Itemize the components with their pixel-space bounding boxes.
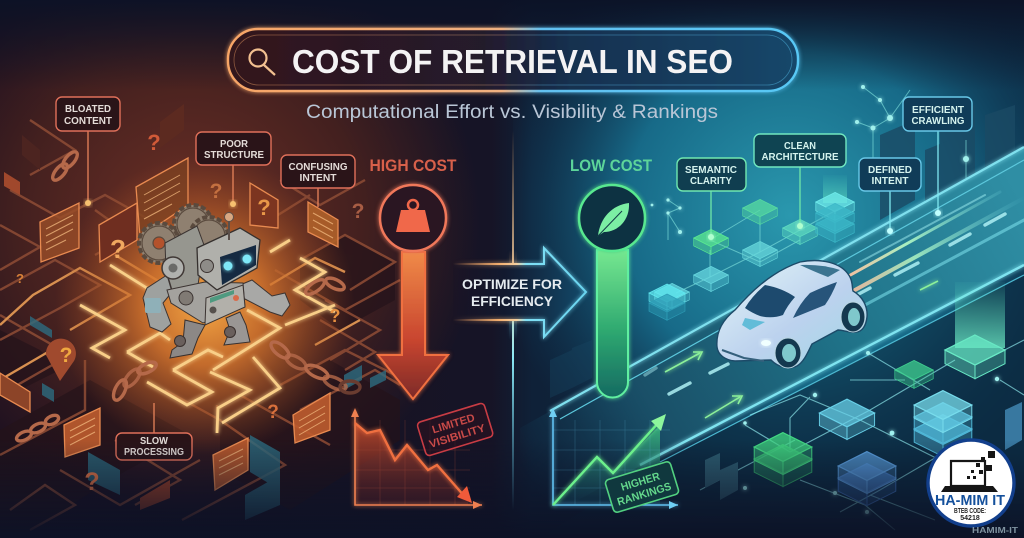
clean architecture label: CLEAN: [784, 141, 816, 152]
robot: [139, 205, 290, 358]
question marks: ?: [147, 130, 161, 155]
area below road: [540, 275, 1024, 538]
panel: lower right network: [700, 282, 1024, 530]
maze walls bright: [0, 255, 360, 380]
efficient crawling label: EFFICIENT: [912, 105, 964, 116]
question marks: ?: [210, 180, 222, 203]
confusing intent label: [281, 155, 355, 207]
road dashes: [611, 214, 1005, 396]
semantic clarity label: CLARITY: [690, 176, 732, 187]
poor structure label: STRUCTURE: [204, 150, 264, 161]
efficient crawling label: [903, 97, 972, 216]
limited visibility stamp: [417, 403, 494, 456]
dark wall blocks: [0, 235, 400, 538]
icon: feather: [597, 203, 629, 237]
title search bar: [228, 29, 798, 91]
map pin with question mark: [46, 339, 76, 381]
clean architecture label: [754, 134, 846, 229]
document panels: [0, 104, 338, 510]
higher rankings stamp: [605, 461, 679, 513]
divider: [509, 130, 517, 510]
network nodes top: [651, 85, 969, 234]
semantic clarity label: [677, 158, 746, 240]
robot glow overlay: [45, 150, 365, 460]
logo badge: 54218: [960, 515, 980, 522]
clean architecture label: ARCHITECTURE: [762, 152, 839, 163]
road: [520, 147, 1024, 525]
poor structure label: [196, 132, 271, 207]
question marks: ?: [257, 195, 271, 220]
low cost heading: LOW COST: [570, 156, 653, 175]
limited visibility stamp: VISIBILITY: [428, 422, 487, 451]
logo badge: HA-MIM IT: [935, 492, 1005, 509]
limited visibility stamp: LIMITED: [431, 412, 476, 436]
back body: [165, 226, 204, 290]
chart: limited visibility: [351, 403, 494, 509]
head: [197, 228, 260, 290]
slow processing label: [116, 403, 192, 460]
bottom fade: [0, 440, 1024, 538]
question marks: ?: [110, 234, 126, 264]
icon: magnifier: [250, 50, 275, 75]
question marks: ?: [267, 402, 279, 423]
arrow: optimize for efficiency: [453, 248, 586, 337]
car: [717, 261, 867, 368]
torso: [167, 282, 245, 323]
maze walls lit: [80, 240, 335, 433]
glowing tower: [955, 282, 1005, 348]
chart: higher rankings: [549, 408, 679, 513]
semantic clarity label: SEMANTIC: [685, 165, 737, 176]
watermark: HAMIM-IT: [972, 526, 1018, 535]
icon: weight: [396, 200, 430, 232]
server near gauge: [649, 284, 685, 320]
confusing intent label: INTENT: [300, 173, 336, 184]
bloated content label: [56, 97, 120, 206]
poor structure label: POOR: [220, 139, 249, 150]
higher rankings stamp: HIGHER: [620, 471, 661, 494]
speed streaks: [845, 192, 1024, 305]
right arm: [240, 280, 290, 316]
slow processing label: PROCESSING: [124, 447, 184, 458]
arrow: optimize for efficiency: EFFICIENCY: [471, 294, 553, 309]
slow processing label: SLOW: [140, 436, 169, 447]
question marks: ?: [330, 306, 340, 326]
bloated content label: BLOATED: [65, 104, 111, 115]
blocks top: [743, 199, 777, 225]
logo badge: [928, 440, 1014, 526]
bloated content label: CONTENT: [64, 116, 112, 127]
arrow: optimize for efficiency: OPTIMIZE FOR: [462, 277, 562, 292]
higher rankings stamp: RANKINGS: [616, 481, 673, 509]
panel: low cost network: [550, 85, 1015, 398]
efficient crawling label: CRAWLING: [912, 116, 965, 127]
gears: [139, 205, 228, 263]
confusing intent label: CONFUSING: [288, 162, 348, 173]
chains: [15, 149, 360, 443]
defined intent label: [859, 158, 921, 234]
panel: high cost maze: [0, 104, 400, 538]
title: COST OF RETRIEVAL IN SEO: [292, 43, 733, 80]
server glowing: [816, 175, 854, 242]
icon: laptop: [941, 451, 998, 492]
blue panels: [30, 316, 386, 520]
question marks: ?: [84, 468, 100, 496]
dim city: [550, 105, 1015, 398]
high cost heading: HIGH COST: [370, 156, 457, 175]
question marks: ?: [16, 271, 24, 286]
subtitle: Computational Effort vs. Visibility & Rankings: [306, 102, 718, 123]
road arrows: [665, 281, 938, 418]
high cost gauge arrow: [378, 185, 448, 399]
defined intent label: INTENT: [872, 176, 908, 187]
defined intent label: DEFINED: [868, 165, 912, 176]
maze walls dim: [0, 120, 400, 530]
logo badge: BTEB CODE:: [954, 508, 986, 515]
low cost gauge: [579, 185, 645, 398]
network lines top: [668, 87, 966, 293]
legs: [170, 320, 205, 358]
map pin with question mark: ?: [60, 344, 72, 367]
question marks: ?: [352, 200, 364, 223]
question marks: [16, 130, 364, 496]
left arm: [143, 275, 172, 332]
